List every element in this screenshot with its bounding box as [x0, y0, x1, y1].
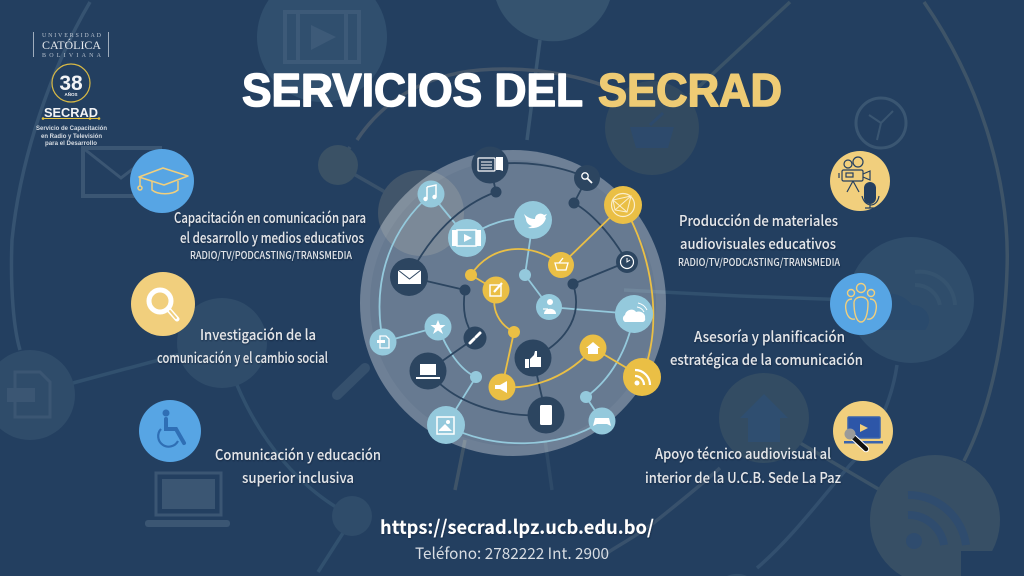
website url: https://secrad.lpz.ucb.edu.bo/ — [380, 513, 654, 540]
node: mobile — [528, 396, 564, 434]
node: document — [370, 328, 396, 356]
connector lines: gold — [471, 205, 653, 387]
logo: SECRAD description: Servicio de Capacitación — [36, 126, 107, 132]
node: megaphone — [488, 374, 516, 400]
node: search — [574, 165, 600, 191]
node: laptop — [410, 352, 446, 390]
node: link — [464, 326, 486, 350]
icon: wheelchair — [139, 400, 201, 462]
node: basket — [548, 252, 574, 278]
node: home — [580, 334, 606, 362]
connector lines: dark — [409, 163, 627, 415]
logo: Universidad Católica Boliviana: BOLIVIANA — [42, 53, 102, 59]
logo: SECRAD wordmark: SECRAD — [44, 106, 98, 120]
service text: producción: RADIO/TV/PODCASTING/TRANSMEDIA — [678, 255, 840, 270]
node: thumbs up — [514, 340, 552, 376]
service text: asesoría: estratégica de la comunicación — [670, 349, 863, 370]
service text: apoyo técnico: Apoyo técnico audiovisual al — [655, 443, 831, 464]
service text: apoyo técnico — [645, 443, 841, 488]
disc — [360, 150, 666, 456]
service text: educación inclusiva: superior inclusiva — [242, 467, 354, 488]
logo: 38 años badge — [52, 64, 90, 102]
phone: Teléfono: 2782222 Int. 2900 — [415, 542, 609, 564]
node: edit — [482, 276, 510, 304]
service text: investigación: comunicación y el cambio social — [157, 347, 328, 368]
service text: educación inclusiva: Comunicación y educación — [215, 444, 381, 465]
service text: apoyo técnico: interior de la U.C.B. Sede La Paz — [645, 467, 841, 488]
service text: capacitación: el desarrollo y medios educativos — [180, 227, 364, 248]
logo: 38 años badge: 38 — [59, 72, 83, 95]
node: film — [448, 219, 486, 257]
node: globe — [604, 186, 642, 224]
icon: people group — [830, 273, 892, 335]
service text: producción — [678, 210, 840, 270]
title: SERVICIOS DEL — [242, 64, 583, 116]
logo: 38 años badge: AÑOS — [64, 91, 78, 97]
node: twitter — [514, 201, 552, 239]
central network diagram — [360, 146, 666, 456]
logo: SECRAD description — [36, 126, 107, 147]
logo: Universidad Católica Boliviana: UNIVERSIDAD — [42, 33, 102, 39]
service text: asesoría — [670, 326, 863, 370]
node: chat — [472, 146, 508, 184]
service text: capacitación: RADIO/TV/PODCASTING/TRANSMEDIA — [190, 248, 352, 263]
logo: SECRAD description: en Radio y Televisión — [41, 134, 102, 140]
logo: Universidad Católica Boliviana: CATÓLICA — [42, 38, 102, 52]
title — [242, 64, 782, 116]
node: music — [418, 180, 444, 208]
service text: capacitación: Capacitación en comunicación para — [174, 207, 366, 228]
icon: magnifier — [131, 272, 195, 336]
service text: producción: Producción de materiales — [679, 210, 838, 231]
node: rss — [623, 358, 661, 396]
node: user — [536, 294, 562, 320]
icon: screen and microphone — [833, 401, 893, 461]
service text: capacitación — [174, 207, 366, 263]
icon: camera and microphone — [830, 151, 890, 211]
node: envelope — [390, 258, 428, 296]
service text: educación inclusiva — [215, 444, 381, 488]
service text: investigación — [157, 324, 328, 368]
node: cloud — [615, 295, 653, 333]
node: clock — [616, 251, 638, 273]
title: SECRAD — [598, 64, 782, 116]
logo: SECRAD description: para el Desarrollo — [45, 141, 97, 147]
service text: investigación: Investigación de la — [200, 324, 316, 345]
node: gamepad — [588, 408, 616, 434]
connector lines: light blue — [380, 194, 634, 443]
junction dots — [460, 186, 592, 403]
node: photo — [427, 406, 465, 444]
node: star — [424, 314, 452, 340]
service text: producción: audiovisuales educativos — [680, 233, 836, 254]
logo: Universidad Católica Boliviana — [33, 32, 109, 59]
icon: graduation cap — [130, 149, 194, 213]
service text: asesoría: Asesoría y planificación — [694, 326, 845, 347]
